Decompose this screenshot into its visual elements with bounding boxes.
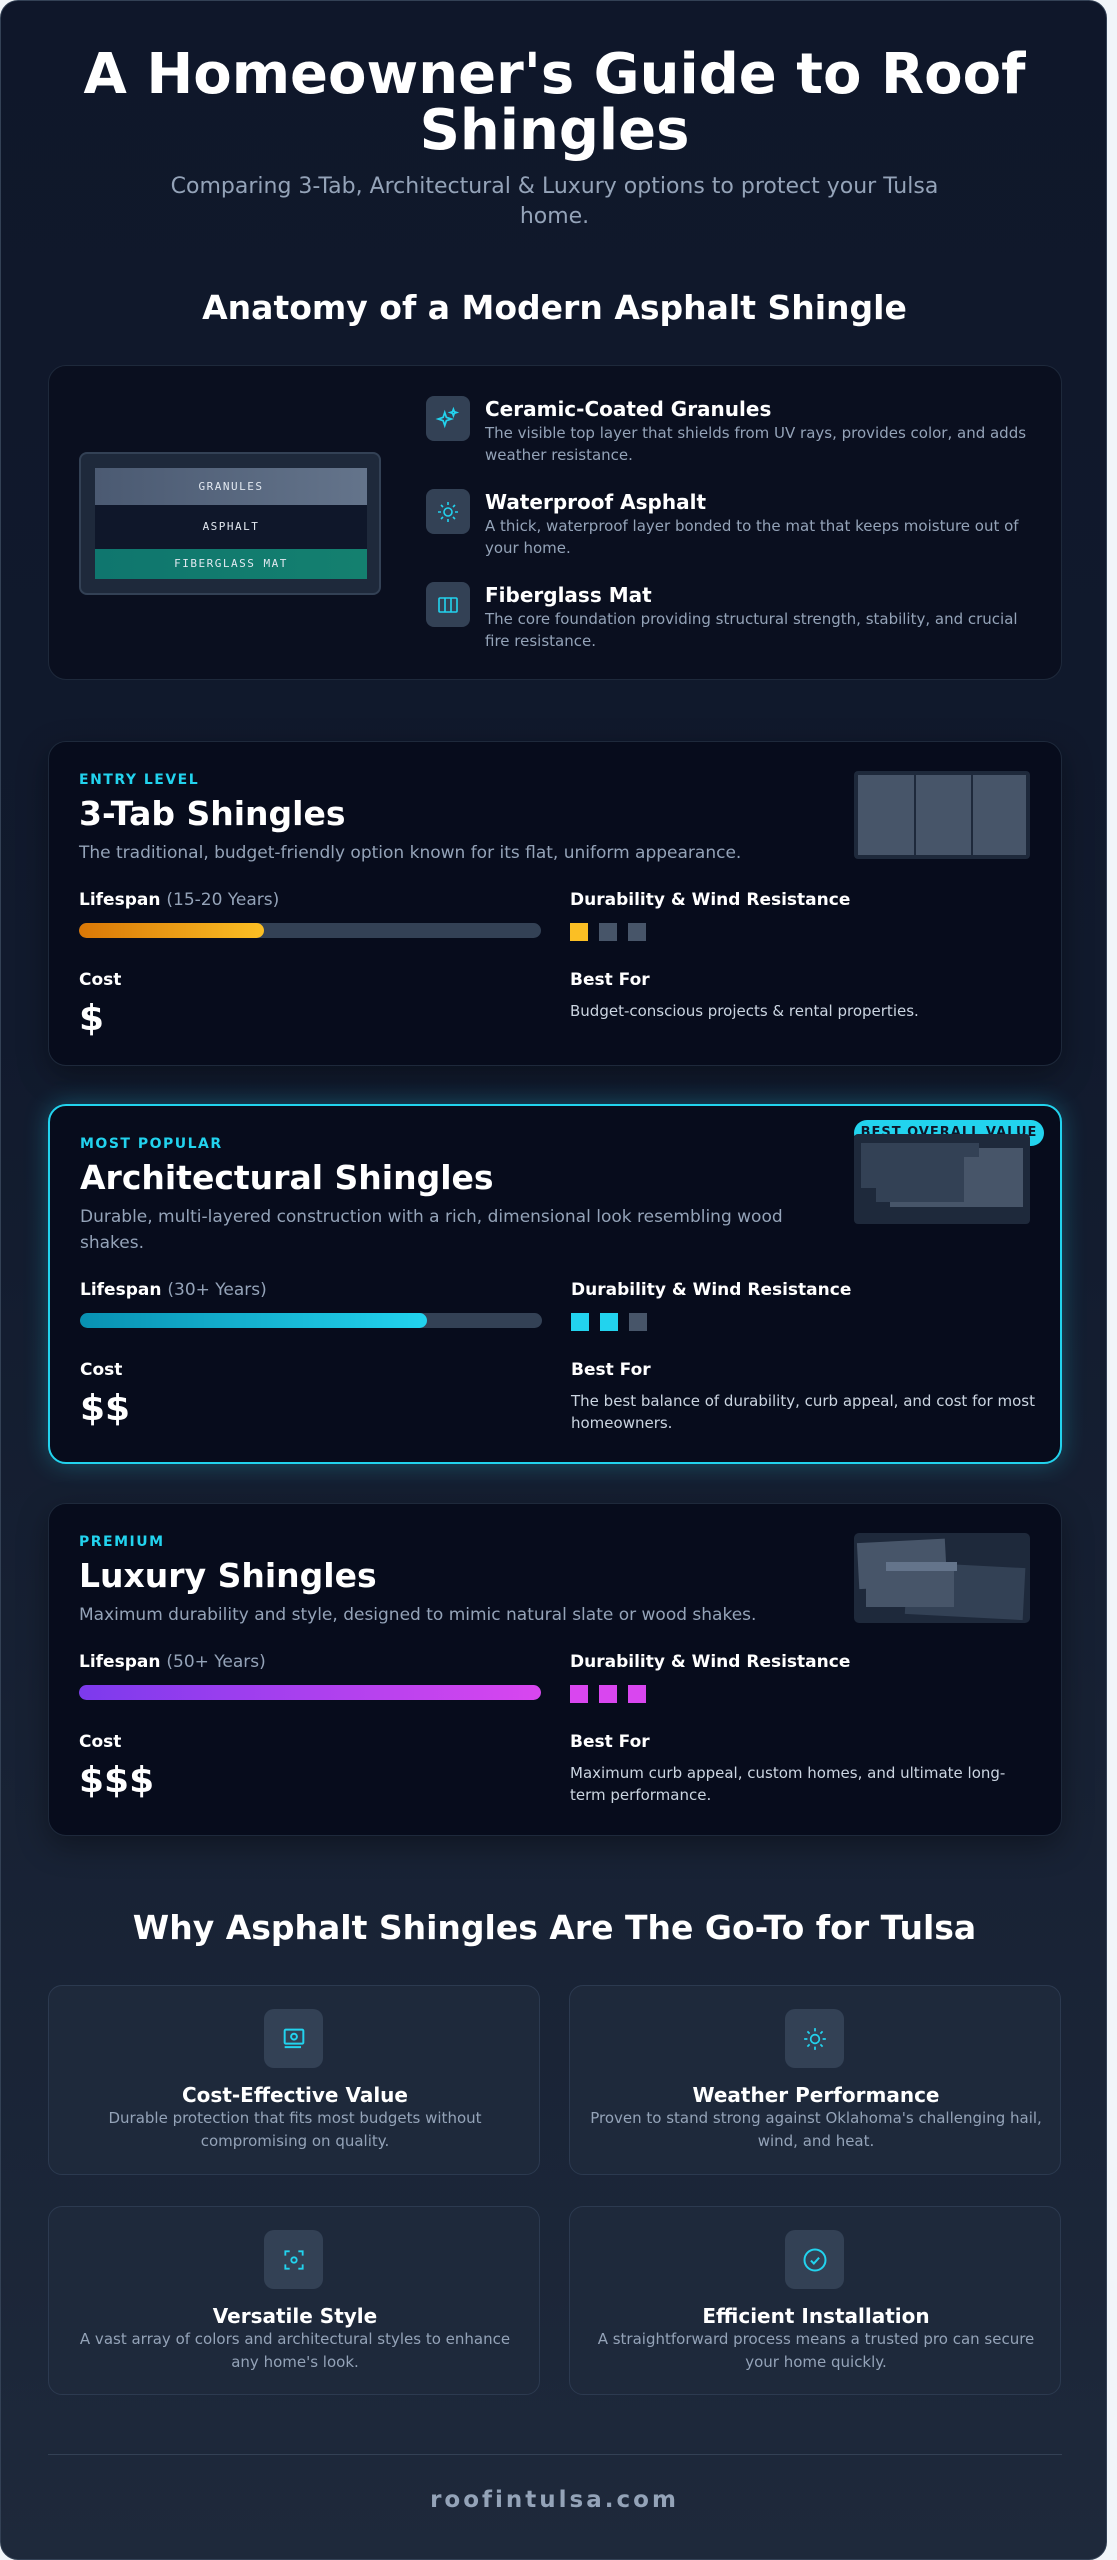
best for: The best balance of durability, curb appeal, and cost for most [571, 1392, 1035, 1410]
card: architectural [48, 1104, 1062, 1464]
item: granules: The visible top layer that shields from UV rays, provides color, and adds [485, 424, 1026, 442]
heading: why: Why Asphalt Shingles Are The Go-To for Tulsa [133, 1908, 976, 1947]
item: fiberglass: fire resistance. [485, 632, 596, 650]
title [84, 42, 1026, 163]
benefit: style: Versatile Style [213, 2304, 377, 2328]
icon: money [264, 2009, 323, 2068]
best for: Best For [570, 1732, 650, 1752]
icon: sun [785, 2009, 844, 2068]
badge: BEST OVERALL VALUE [861, 1125, 1037, 1140]
benefit: style [48, 2206, 540, 2395]
best for: homeowners. [571, 1414, 672, 1432]
card: 3-tab [48, 741, 1062, 1066]
best for [570, 970, 919, 1020]
cost: $$ [80, 1388, 130, 1429]
durability rating: Durability & Wind Resistance [571, 1280, 851, 1300]
cost [79, 970, 121, 1039]
panel: anatomy [48, 365, 1062, 680]
layer: fiberglass: FIBERGLASS MAT [174, 557, 288, 570]
best for [570, 1732, 1005, 1804]
best for: Maximum curb appeal, custom homes, and ultimate long- [570, 1764, 1005, 1782]
benefit: cost-effective: Durable protection that fits most budgets without compromising on quality. [108, 2109, 482, 2150]
card: architectural: MOST POPULAR [80, 1136, 223, 1152]
lifespan bar: Lifespan (30+ Years) [80, 1280, 267, 1300]
item: granules: weather resistance. [485, 446, 633, 464]
lifespan bar: Lifespan (50+ Years) [79, 1652, 266, 1672]
cost: Cost [79, 970, 121, 990]
best for: Budget-conscious projects & rental properties. [570, 1002, 919, 1020]
best for: term performance. [570, 1786, 711, 1804]
icon: check [785, 2230, 844, 2289]
card: 3-tab: The traditional, budget-friendly option known for its flat, uniform appearance. [79, 843, 741, 863]
card: luxury [48, 1503, 1062, 1836]
benefit: weather [569, 1985, 1061, 2175]
cost: Cost [80, 1360, 122, 1380]
benefit: weather: Weather Performance [692, 2083, 939, 2107]
layer: granules [95, 468, 367, 505]
layer: fiberglass [95, 549, 367, 579]
subtitle [171, 174, 938, 229]
item: fiberglass: Fiberglass Mat [485, 583, 652, 607]
card: luxury: Maximum durability and style, designed to mimic natural slate or wood shakes. [79, 1605, 756, 1625]
subtitle: home. [520, 204, 589, 229]
icon: focus [264, 2230, 323, 2289]
footer: roofintulsa.com [430, 2487, 679, 2513]
benefit: installation [569, 2206, 1061, 2395]
thumbnail: 3-tab [854, 771, 1030, 859]
icon: sun [426, 489, 470, 534]
badge [854, 1120, 1044, 1146]
durability rating [571, 1280, 851, 1331]
item: granules [426, 396, 1026, 464]
benefit: installation: A straightforward process means a trusted pro can secure your home quickly. [598, 2330, 1034, 2371]
item: asphalt: Waterproof Asphalt [485, 490, 706, 514]
icon: sparkles [426, 396, 470, 441]
durability rating: Durability & Wind Resistance [570, 890, 850, 910]
card: luxury: Luxury Shingles [79, 1556, 377, 1595]
durability rating [570, 1652, 850, 1703]
layer: asphalt [95, 505, 367, 549]
cost [80, 1360, 130, 1429]
layer: asphalt: ASPHALT [203, 520, 259, 533]
item: asphalt [426, 489, 1019, 557]
heading: anatomy: Anatomy of a Modern Asphalt Shingle [202, 288, 907, 327]
benefit: cost-effective: Cost-Effective Value [182, 2083, 408, 2107]
thumbnail: luxury [854, 1533, 1030, 1623]
item: granules: Ceramic-Coated Granules [485, 397, 771, 421]
cost: Cost [79, 1732, 121, 1752]
card: architectural: Architectural Shingles [80, 1158, 494, 1197]
item: asphalt: your home. [485, 539, 571, 557]
durability rating: Durability & Wind Resistance [570, 1652, 850, 1672]
item: fiberglass: The core foundation providing structural strength, stability, and crucial [485, 610, 1018, 628]
benefit: cost-effective [48, 1985, 540, 2175]
benefit: weather: Proven to stand strong against Oklahoma's challenging hail, wind, and heat. [590, 2109, 1042, 2150]
lifespan bar [80, 1280, 542, 1328]
card: architectural: Durable, multi-layered construction with a rich, dimensional look resembling wood shakes. [80, 1207, 783, 1253]
best for: Best For [571, 1360, 651, 1380]
lifespan bar: Lifespan (15-20 Years) [79, 890, 279, 910]
item: asphalt: A thick, waterproof layer bonded to the mat that keeps moisture out of [485, 517, 1019, 535]
cost: $ [79, 998, 104, 1039]
best for: Best For [570, 970, 650, 990]
best for [570, 1360, 1035, 1432]
layer: granules: GRANULES [198, 480, 263, 493]
durability rating [570, 890, 850, 941]
title: Shingles [420, 98, 689, 163]
layer diagram [79, 452, 381, 595]
subtitle: Comparing 3-Tab, Architectural & Luxury options to protect your Tulsa [171, 174, 938, 199]
benefit: installation: Efficient Installation [702, 2304, 930, 2328]
lifespan bar [79, 1652, 541, 1700]
title: A Homeowner's Guide to Roof [84, 42, 1025, 107]
benefit: style: A vast array of colors and architectural styles to enhance any home's look. [80, 2330, 510, 2371]
card: luxury: PREMIUM [79, 1534, 165, 1550]
card: 3-tab: ENTRY LEVEL [79, 772, 199, 788]
cost [79, 1732, 154, 1801]
thumbnail: architectural [854, 1134, 1030, 1224]
lifespan bar [79, 890, 541, 938]
icon: mat [426, 582, 470, 627]
card: 3-tab: 3-Tab Shingles [79, 794, 345, 833]
cost: $$$ [79, 1760, 154, 1801]
item: fiberglass [426, 582, 1018, 650]
